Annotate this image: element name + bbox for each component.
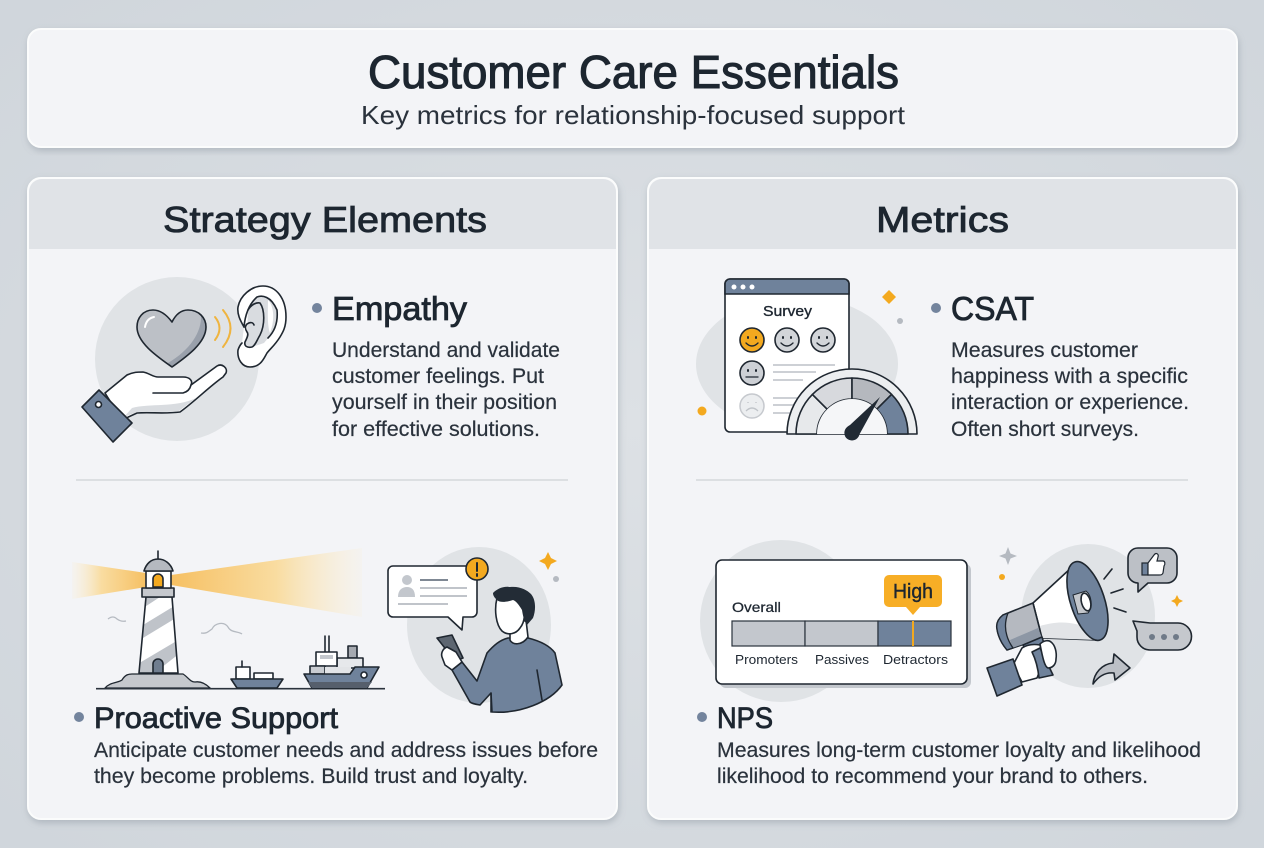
text: csat	[931, 290, 1189, 441]
text: empathy: Understand and validate	[332, 339, 560, 362]
text: empathy	[312, 290, 560, 441]
chart: nps bar card	[700, 540, 971, 702]
panel: strategy elements	[28, 178, 617, 819]
text: csat: happiness with a specific	[951, 365, 1188, 388]
text: empathy: for effective solutions.	[332, 418, 540, 441]
text: csat: interaction or experience.	[951, 391, 1189, 414]
chart: nps bar card: Promoters	[735, 652, 799, 667]
icon: survey window and gauge	[696, 279, 917, 440]
text: proactive support: Anticipate customer needs and address issues before	[94, 739, 598, 762]
text: nps: Measures long-term customer loyalty and likelihood	[717, 739, 1201, 762]
chart: nps bar card: Overall	[732, 599, 781, 615]
text: empathy: customer feelings. Put	[332, 365, 544, 388]
icon: megaphone with reactions	[987, 544, 1192, 696]
panel: metrics	[648, 178, 1237, 819]
text: nps: likelihood to recommend your brand to others.	[717, 765, 1148, 788]
callout: high: High	[893, 581, 933, 603]
text: proactive support	[74, 702, 598, 788]
icon: survey window and gauge: Survey	[763, 304, 813, 320]
text: proactive support: they become problems. Build trust and loyalty.	[94, 765, 528, 788]
text: empathy: Empathy	[332, 290, 468, 327]
text: csat: CSAT	[951, 290, 1034, 327]
text: csat: Often short surveys.	[951, 418, 1139, 441]
chart: nps bar card: Passives	[815, 652, 870, 667]
callout: high	[884, 575, 942, 615]
text: proactive support: Proactive Support	[94, 702, 339, 735]
title banner	[28, 29, 1237, 147]
icon: lighthouse with ships	[72, 548, 385, 689]
heading: metrics: Metrics	[876, 199, 1009, 240]
text: csat: Measures customer	[951, 339, 1138, 362]
heading: strategy elements: Strategy Elements	[163, 199, 487, 240]
icon: person with phone and alert bubble	[388, 547, 562, 712]
text: nps	[697, 702, 1201, 788]
title: Customer Care Essentials	[368, 46, 899, 98]
text: nps: NPS	[717, 702, 773, 735]
icon: heart in hand and ear	[82, 277, 286, 442]
text: empathy: yourself in their position	[332, 391, 557, 414]
chart: nps bar card: Detractors	[883, 652, 949, 667]
subtitle: Key metrics for relationship-focused support	[361, 100, 906, 130]
